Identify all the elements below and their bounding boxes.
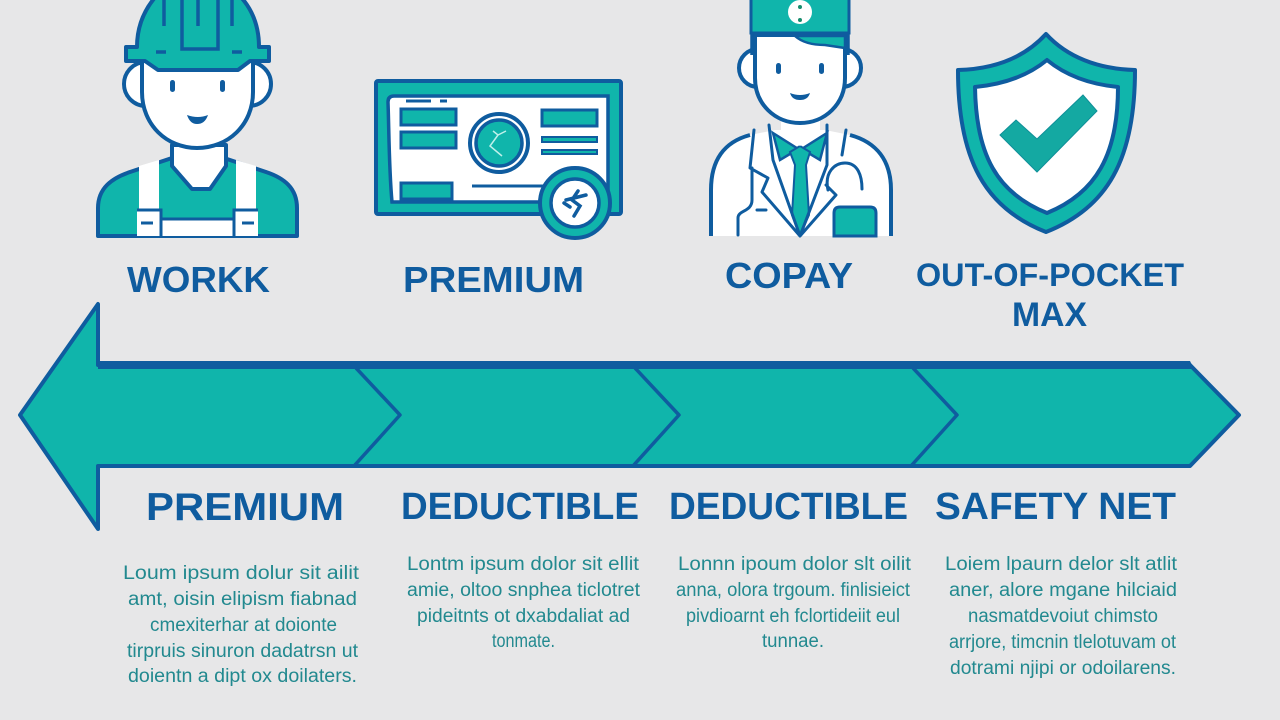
text block: premium: tirpruis sinuron dadatrsn ut <box>127 641 359 662</box>
card stamp <box>540 168 610 238</box>
doctor ears <box>739 49 861 87</box>
arrow shape <box>20 304 1239 529</box>
text block: safety net: Loiem lpaurn delor slt atlit <box>945 554 1178 575</box>
top label: out-of-pocket max: OUT-OF-POCKET <box>916 257 1184 293</box>
icon: doctor <box>711 0 891 236</box>
text block: deductible <box>407 554 641 652</box>
card frame <box>376 81 621 214</box>
timeline arrow <box>20 304 1239 529</box>
heading: premium: PREMIUM <box>146 486 344 529</box>
card left field bars <box>401 101 456 199</box>
text block: deductible: Lontm ipsum dolor sit ellit <box>407 554 640 575</box>
text block: safety net: dotrami njipi or odoilarens. <box>950 658 1176 679</box>
text block: deductible second <box>676 554 912 652</box>
top label: out-of-pocket max <box>916 257 1184 334</box>
doctor face <box>755 35 845 123</box>
shield inner <box>975 60 1118 213</box>
icon: premium card <box>376 81 621 238</box>
card inner panel <box>388 96 608 202</box>
doctor neck <box>781 118 820 146</box>
icon: shield with check <box>958 34 1135 232</box>
arrow top band <box>98 361 1194 369</box>
top label: copay: COPAY <box>725 255 853 296</box>
worker face <box>142 55 253 148</box>
text block: safety net: aner, alore mgane hilciaid <box>949 580 1177 601</box>
heading: deductible: DEDUCTIBLE <box>401 486 639 528</box>
text block: safety net <box>945 554 1178 679</box>
doctor eyes and smile <box>776 63 824 100</box>
card right field bars <box>472 110 597 186</box>
text block: deductible: tonmate. <box>492 631 555 652</box>
text block: deductible second: anna, olora trgoum. finlisieict <box>676 580 911 601</box>
heading: safety net: SAFETY NET <box>935 486 1176 528</box>
worker overall straps <box>137 160 258 236</box>
text block: safety net: arrjore, timcnin tlelotuvam ot <box>949 632 1177 653</box>
doctor teal collar <box>773 133 827 160</box>
text block: premium: doientn a dipt ox doilaters. <box>128 666 357 687</box>
doctor lapels and stethoscope <box>738 125 862 236</box>
doctor tie <box>790 146 810 235</box>
chevron dividers <box>354 368 957 466</box>
worker ears <box>124 62 271 106</box>
worker eyes and smile <box>170 80 225 124</box>
heading: deductible second: DEDUCTIBLE <box>669 486 908 528</box>
worker neck <box>172 145 226 189</box>
text block: deductible: amie, oltoo snphea ticlotret <box>407 580 641 601</box>
text block: deductible second: pivdioarnt eh fclortideiit eul <box>686 606 900 627</box>
doctor coat <box>711 130 891 236</box>
icon: construction worker <box>98 0 297 236</box>
top label: premium: PREMIUM <box>403 259 584 300</box>
text block: deductible: pideitnts ot dxabdaliat ad <box>417 606 630 627</box>
worker body <box>98 158 297 236</box>
doctor cap <box>751 0 849 55</box>
text block: premium: Loum ipsum dolur sit ailit <box>123 563 360 584</box>
top label: workk: WORKK <box>127 259 270 300</box>
hard hat <box>126 0 269 70</box>
text block: safety net: nasmatdevoiut chimsto <box>968 606 1158 627</box>
top label: out-of-pocket max: MAX <box>1012 296 1087 334</box>
text block: deductible second: tunnae. <box>762 631 824 652</box>
shield outer <box>958 34 1135 232</box>
text block: premium <box>123 563 360 687</box>
card center seal <box>470 114 528 172</box>
doctor pocket <box>834 207 876 236</box>
check mark <box>1000 95 1097 172</box>
text block: deductible second: Lonnn ipoum dolor slt oilit <box>678 554 912 575</box>
text block: premium: cmexiterhar at doionte <box>150 615 337 636</box>
text block: premium: amt, oisin elipism fiabnad <box>128 589 357 610</box>
